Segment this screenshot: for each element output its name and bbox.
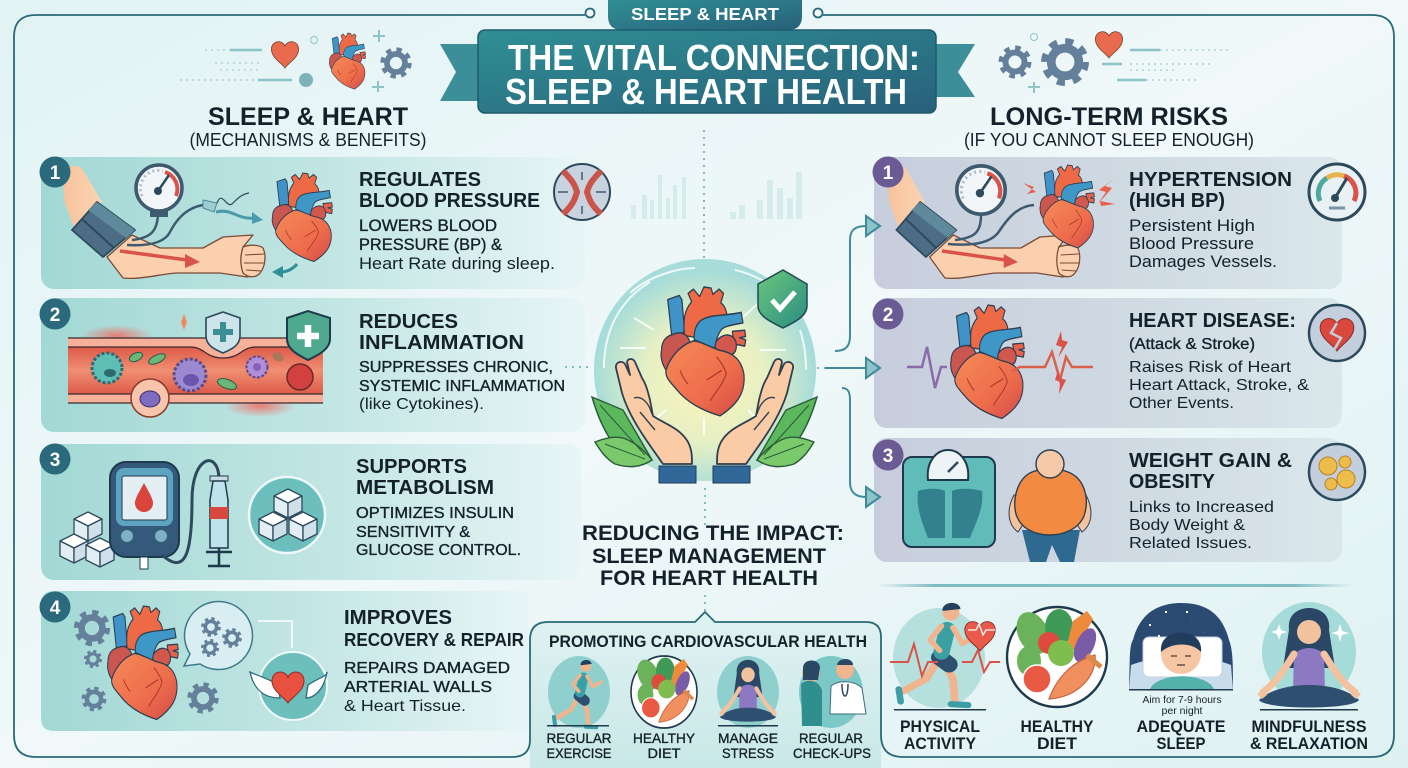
text: supports metabolism: OPTIMIZES INSULIN <box>356 505 514 522</box>
text: heart disease: Raises Risk of Heart <box>1129 359 1292 376</box>
number badge 1 <box>40 156 70 188</box>
frame end rings <box>586 8 822 18</box>
text: hypertension: (HIGH BP) <box>1129 190 1225 212</box>
right column heading <box>964 103 1254 150</box>
number badge 4: 4 <box>50 598 61 619</box>
text: supports metabolism: METABOLISM <box>356 477 494 499</box>
connector arrows to risks <box>825 216 880 507</box>
left column heading: (MECHANISMS & BENEFITS) <box>190 129 426 150</box>
item: regular exercise: EXERCISE <box>546 745 612 761</box>
icon: overweight person <box>1009 450 1091 562</box>
item: mindfulness: MINDFULNESS <box>1252 717 1366 736</box>
item: physical activity: ACTIVITY <box>904 734 977 753</box>
item: adequate sleep: per night <box>1162 705 1203 717</box>
text: heart disease: Heart Attack, Stroke, & <box>1129 377 1309 394</box>
panel: improves recovery and repair <box>40 591 528 731</box>
number badge 1: 1 <box>50 163 61 184</box>
number badge 1 <box>872 156 904 188</box>
panel: heart disease <box>872 298 1365 428</box>
icon: winged heart <box>250 621 327 720</box>
text: supports metabolism: GLUCOSE CONTROL. <box>356 542 521 559</box>
panel: regulates blood pressure <box>40 156 610 289</box>
item: physical activity <box>890 604 1000 753</box>
icon: arm with cuff and gauge <box>64 165 297 278</box>
title banner <box>440 30 975 113</box>
item: regular exercise <box>546 656 612 761</box>
icon: fat cells <box>1309 444 1365 500</box>
item: mindfulness: & RELAXATION <box>1250 734 1368 753</box>
text: regulates blood pressure: BLOOD PRESSURE <box>359 190 540 212</box>
text: improves recovery: RECOVERY & REPAIR <box>344 629 524 650</box>
number badge 2: 2 <box>883 305 893 326</box>
number badge 3: 3 <box>50 450 60 471</box>
item: adequate sleep: SLEEP <box>1156 734 1206 753</box>
item: healthy diet: HEALTHY <box>633 730 696 746</box>
title banner: SLEEP & HEART HEALTH <box>505 71 907 112</box>
text: weight gain: Related Issues. <box>1129 535 1252 552</box>
title banner: THE VITAL CONNECTION: <box>508 37 920 78</box>
text: hypertension: HYPERTENSION <box>1129 169 1292 191</box>
text: hypertension: Blood Pressure <box>1129 235 1254 253</box>
icon: stressed heart <box>1023 165 1115 248</box>
item: adequate sleep: Aim for 7-9 hours <box>1142 694 1222 706</box>
icon: shield check <box>758 270 807 328</box>
text: hypertension: Damages Vessels. <box>1129 253 1277 271</box>
text: heart disease: HEART DISEASE: <box>1129 310 1296 332</box>
text: regulates blood pressure: PRESSURE (BP) & <box>359 236 502 254</box>
text: supports metabolism: SUPPORTS <box>356 456 467 478</box>
icon: artery with cells and shields <box>68 311 330 417</box>
text: reduces inflammation: (like Cytokines). <box>359 396 484 413</box>
item: physical activity: PHYSICAL <box>900 717 980 736</box>
heading: reducing the impact: FOR HEART HEALTH <box>600 567 818 590</box>
number badge 2 <box>872 298 904 330</box>
item: manage stress <box>717 656 779 761</box>
icon: glucose meter <box>110 462 179 569</box>
right column heading: LONG-TERM RISKS <box>990 103 1228 131</box>
item: regular check-ups <box>793 656 871 761</box>
divider <box>877 584 1352 587</box>
text: reduces inflammation: SUPPRESSES CHRONIC, <box>359 359 553 376</box>
item: regular check-ups: REGULAR <box>799 730 863 746</box>
panel: weight gain <box>872 438 1365 562</box>
number badge 2: 2 <box>50 305 60 326</box>
item: healthy diet: HEALTHY <box>1020 717 1094 736</box>
text: heart disease <box>1129 310 1309 412</box>
text: improves recovery: IMPROVES <box>344 607 452 629</box>
icon: sugar cubes <box>60 512 114 567</box>
item: healthy diet: DIET <box>1037 734 1078 753</box>
text: supports metabolism: SENSITIVITY & <box>356 524 470 541</box>
item: healthy diet <box>1007 607 1107 753</box>
text: improves recovery <box>344 607 524 715</box>
text: heart disease: Other Events. <box>1129 395 1234 412</box>
text: improves recovery: & Heart Tissue. <box>344 698 466 715</box>
text: hypertension <box>1129 169 1292 271</box>
text: weight gain: Links to Increased <box>1129 499 1274 516</box>
number badge 4 <box>40 592 70 622</box>
text: reduces inflammation: SYSTEMIC INFLAMMATION <box>359 378 565 395</box>
panel: reduces inflammation <box>40 298 585 432</box>
icon: syringe <box>162 461 232 566</box>
item: healthy diet <box>631 656 697 761</box>
faded mini bar charts <box>631 172 802 219</box>
left column heading: SLEEP & HEART <box>208 103 408 131</box>
central dotted connectors <box>565 130 825 612</box>
icon: broken heart <box>1309 305 1365 361</box>
decorative icon row: left <box>180 30 409 92</box>
promoting panel backdrop <box>530 612 881 768</box>
icon: large heart <box>108 606 178 719</box>
text: weight gain: OBESITY <box>1129 471 1216 493</box>
heading: reducing the impact: SLEEP MANAGEMENT <box>592 545 826 568</box>
number badge 3 <box>872 440 904 470</box>
text: regulates blood pressure: REGULATES <box>359 169 481 191</box>
number badge 3 <box>40 444 70 474</box>
text: reduces inflammation: REDUCES <box>359 311 458 333</box>
icon: arm and gauge <box>888 166 1080 278</box>
text: reduces inflammation: INFLAMMATION <box>359 332 524 354</box>
icon: dial gauge <box>1309 164 1365 220</box>
panel: supports metabolism <box>40 444 581 580</box>
item: regular check-ups: CHECK-UPS <box>793 745 871 761</box>
icon: narrowed vessel <box>554 164 610 220</box>
text: reduces inflammation <box>359 311 565 413</box>
number badge 3: 3 <box>883 446 893 467</box>
right column heading: (IF YOU CANNOT SLEEP ENOUGH) <box>964 129 1254 150</box>
text: heart disease: (Attack & Stroke) <box>1129 336 1255 353</box>
item: regular exercise: REGULAR <box>546 730 612 746</box>
text: supports metabolism <box>356 456 521 559</box>
header tab <box>608 0 802 30</box>
text: improves recovery: REPAIRS DAMAGED <box>344 660 510 677</box>
text: regulates blood pressure <box>359 169 555 273</box>
icon: cupping hands and leaves <box>592 359 817 483</box>
item: manage stress: STRESS <box>722 745 774 761</box>
text: improves recovery: ARTERIAL WALLS <box>344 679 492 696</box>
item: mindfulness <box>1250 602 1368 753</box>
decorative rays <box>604 268 806 436</box>
heading: reducing the impact <box>582 522 844 590</box>
icon: heart <box>272 173 332 261</box>
left column heading <box>190 103 426 150</box>
text: weight gain <box>1129 450 1292 552</box>
item: manage stress: MANAGE <box>718 730 778 746</box>
panel: hypertension <box>872 156 1365 289</box>
panel: promoting cardiovascular health <box>546 633 871 761</box>
text: hypertension: Persistent High <box>1129 217 1255 235</box>
text: regulates blood pressure: Heart Rate during sleep. <box>359 255 555 273</box>
text: regulates blood pressure: LOWERS BLOOD <box>359 217 497 235</box>
icon: repair bubble <box>184 601 253 669</box>
item: adequate sleep: ADEQUATE <box>1136 717 1226 736</box>
number badge 1: 1 <box>883 163 894 184</box>
item: healthy diet: DIET <box>648 745 681 761</box>
icon: gears <box>77 613 216 711</box>
heading: PROMOTING CARDIOVASCULAR HEALTH <box>549 633 867 651</box>
number badge 2 <box>40 298 70 330</box>
item: adequate sleep <box>1129 603 1233 753</box>
central heart illustration <box>592 259 817 483</box>
panel: sleep management actions <box>890 602 1368 753</box>
text: weight gain: WEIGHT GAIN & <box>1129 450 1292 472</box>
text: weight gain: Body Weight & <box>1129 517 1245 534</box>
decorative icon row: right <box>1001 32 1230 93</box>
icon: bathroom scale <box>903 450 995 547</box>
header tab: SLEEP & HEART <box>631 4 779 24</box>
icon: damaged heart with ecg <box>907 305 1093 418</box>
icon: central heart <box>661 287 746 416</box>
icon: cubes in circle <box>249 477 325 553</box>
heading: reducing the impact: REDUCING THE IMPACT: <box>582 522 844 545</box>
